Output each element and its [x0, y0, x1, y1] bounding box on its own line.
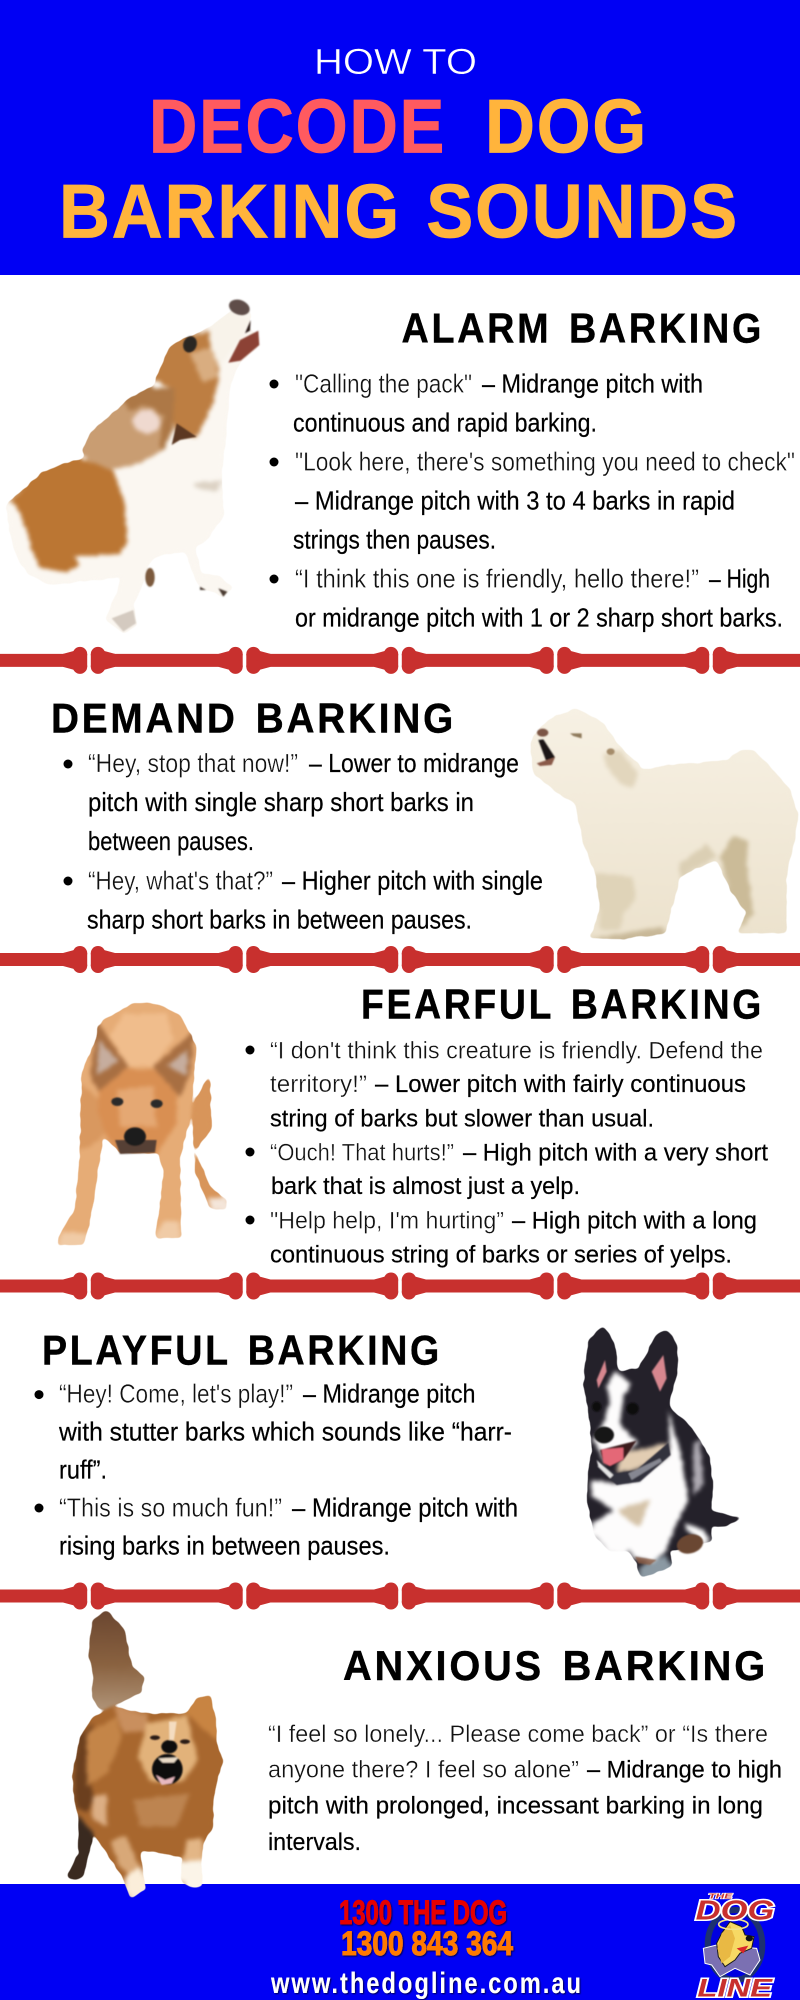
panel: fearful barking: [57, 981, 768, 1269]
phone word number: 1300 THE DOG: [339, 1894, 507, 1932]
bullet list: fearful barking: – Lower pitch with fairly continuous: [375, 1071, 746, 1098]
bullet list: fearful barking: string of barks but slower than usual.: [270, 1106, 654, 1132]
paragraph: anxious barking: anyone there? I feel so alone”: [268, 1757, 579, 1784]
bullet list: alarm barking: "Calling the pack": [295, 368, 472, 398]
bullet list: fearful barking: territory!”: [270, 1071, 367, 1098]
title: decode: DECODE: [149, 85, 446, 170]
phone number: 1300 843 364: [341, 1925, 513, 1963]
bullet list: demand barking: – Lower to midrange: [309, 748, 519, 778]
bullet list: alarm barking: strings then pauses.: [293, 525, 496, 555]
bullet list: fearful barking: – High pitch with a very short: [463, 1139, 768, 1166]
footer banner: [0, 1884, 800, 2000]
bone divider 2: [0, 946, 800, 974]
bullet list: fearful barking: – High pitch with a long: [512, 1208, 757, 1234]
bullet list: alarm barking: [270, 368, 795, 633]
logo: the dog line: [696, 1891, 774, 2000]
dog photo: black and white puppy running: [583, 1326, 743, 1578]
bullet list: demand barking: – Higher pitch with single: [282, 865, 543, 895]
bullet list: fearful barking: bark that is almost just a yelp.: [271, 1173, 580, 1200]
bullet list: alarm barking: “I think this one is friendly, hello there!”: [295, 564, 699, 594]
bullet list: fearful barking: "Help help, I'm hurting”: [270, 1208, 504, 1234]
title: dog: DOG: [485, 85, 648, 170]
bullet list: playful barking: “This is so much fun!”: [59, 1492, 282, 1522]
bullet list: demand barking: “Hey, what's that?”: [88, 865, 273, 895]
panel: anxious barking: [67, 1610, 782, 1897]
bone divider 3: [0, 1272, 800, 1300]
heading: anxious barking: ANXIOUS BARKING: [343, 1642, 768, 1689]
bone divider 4: [0, 1582, 800, 1610]
dog photo: white poodle: [530, 708, 798, 939]
logo: the dog line: DOG: [696, 1894, 774, 1925]
dog photo: beagle howling: [6, 297, 260, 633]
website: www.thedogline.com.au: [270, 1967, 583, 2000]
bullet list: alarm barking: – Midrange pitch with 3 to 4 barks in rapid: [295, 486, 735, 516]
bullet list: playful barking: rising barks in between pauses.: [59, 1530, 390, 1560]
paragraph: anxious barking: “I feel so lonely... Please come back” or “Is there: [268, 1721, 768, 1748]
bullet list: playful barking: ruff”.: [59, 1455, 107, 1485]
heading: playful barking: PLAYFUL BARKING: [42, 1327, 442, 1374]
panel: demand barking: [51, 694, 798, 939]
bullet list: fearful barking: “Ouch! That hurts!”: [270, 1139, 454, 1166]
header banner: [0, 0, 800, 275]
heading: alarm barking: ALARM BARKING: [402, 305, 764, 352]
bone divider 1: [0, 646, 800, 674]
bullet list: fearful barking: continuous string of barks or series of yelps.: [270, 1242, 732, 1269]
dog photo: tan dog facing forward: [57, 1003, 227, 1245]
paragraph: anxious barking: [268, 1721, 782, 1856]
panel: alarm barking: [6, 297, 795, 633]
paragraph: anxious barking: intervals.: [268, 1829, 361, 1856]
bullet list: demand barking: between pauses.: [88, 826, 254, 856]
bullet list: fearful barking: [246, 1038, 768, 1269]
logo: the dog line: THE: [708, 1891, 734, 1900]
bullet list: demand barking: pitch with single sharp short barks in: [88, 787, 474, 817]
panel: playful barking: [34, 1326, 743, 1578]
bullet list: demand barking: sharp short barks in between pauses.: [87, 904, 472, 934]
dog photo: brown fluffy dog barking: [67, 1610, 223, 1897]
bullet list: playful barking: – Midrange pitch with: [292, 1492, 518, 1522]
paragraph: anxious barking: – Midrange to high: [587, 1757, 782, 1784]
bullet list: alarm barking: – High: [709, 564, 770, 594]
heading: demand barking: DEMAND BARKING: [51, 694, 456, 741]
title: barking sounds: BARKING SOUNDS: [59, 170, 739, 255]
bullet list: demand barking: “Hey, stop that now!”: [88, 748, 298, 778]
bullet list: playful barking: [34, 1379, 518, 1560]
bullet list: alarm barking: continuous and rapid barking.: [293, 408, 597, 438]
title: how to: HOW TO: [314, 41, 477, 82]
bullet list: demand barking: [64, 748, 543, 934]
bullet list: fearful barking: “I don't think this creature is friendly. Defend the: [270, 1038, 763, 1064]
bullet list: alarm barking: – Midrange pitch with: [482, 368, 703, 398]
bullet list: playful barking: with stutter barks which sounds like “harr-: [58, 1417, 512, 1447]
bullet list: playful barking: – Midrange pitch: [303, 1379, 476, 1409]
bullet list: playful barking: “Hey! Come, let's play!”: [59, 1379, 293, 1409]
paragraph: anxious barking: pitch with prolonged, incessant barking in long: [268, 1792, 763, 1819]
